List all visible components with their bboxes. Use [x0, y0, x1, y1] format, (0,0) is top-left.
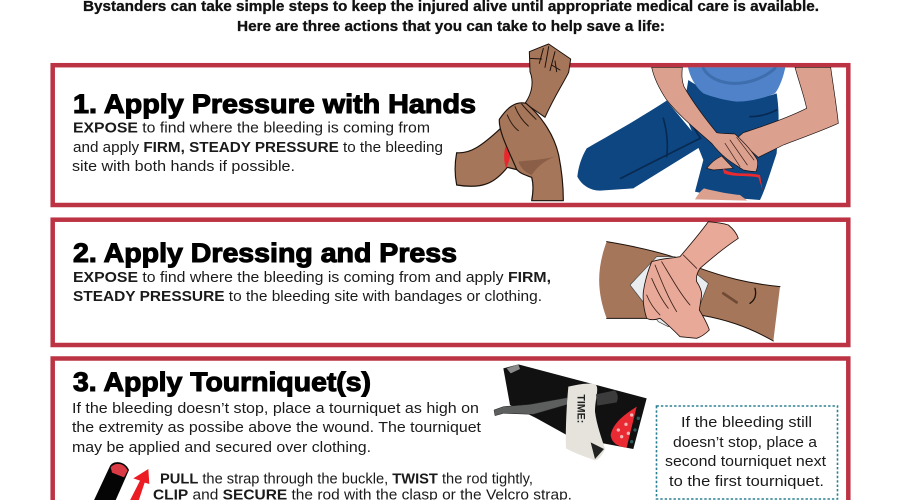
text: step 3 instructions: the extremity as possibe above the wound. The tourniquet: [72, 420, 481, 436]
text: step 1 instructions: [72, 120, 443, 175]
intro text: [83, 0, 819, 35]
panel: step 2 apply dressing and press: [53, 220, 848, 345]
text: step 1 instructions: EXPOSE to find where the bleeding is coming from: [73, 120, 430, 136]
text: pull, twist, clip and secure: PULL the strap through the buckle, TWIST the rod tightly,: [160, 472, 533, 488]
callout: second tourniquet: If the bleeding still: [681, 415, 812, 431]
callout: second tourniquet: second tourniquet next: [665, 454, 826, 470]
text: step 3 instructions: may be applied and secured over clothing.: [72, 440, 371, 456]
text: step 2 instructions: [73, 270, 551, 305]
panel: step 1 apply pressure with hands: [53, 44, 848, 205]
arrow: pull direction: [129, 469, 149, 500]
icon: tourniquet strap: [93, 462, 129, 500]
intro text: Here are three actions that you can take to help save a life:: [237, 19, 665, 35]
heading: step 2: 2. Apply Dressing and Press: [73, 238, 457, 268]
text: step 3 instructions: [72, 401, 481, 456]
heading: step 3: 3. Apply Tourniquet(s): [73, 367, 371, 397]
text: pull, twist, clip and secure: [153, 472, 572, 500]
icon: tourniquet: [494, 364, 647, 460]
icon: hands pressing a dressing on an arm: [599, 222, 780, 341]
heading: step 1: 1. Apply Pressure with Hands: [73, 89, 476, 119]
panel: step 3 apply tourniquets: [53, 358, 848, 500]
callout: second tourniquet: [656, 406, 838, 499]
text: step 1 instructions: site with both hands if possible.: [72, 159, 295, 175]
text: step 2 instructions: STEADY PRESSURE to the bleeding site with bandages or clothing.: [73, 289, 542, 305]
icon: hand gripping a bleeding arm: [455, 44, 838, 201]
text: step 1 instructions: and apply FIRM, STEADY PRESSURE to the bleeding: [73, 140, 443, 156]
callout: second tourniquet: doesn’t stop, place a: [673, 435, 818, 451]
callout: second tourniquet: to the first tourniquet.: [669, 474, 824, 490]
text: step 2 instructions: EXPOSE to find where the bleeding is coming from and apply FIRM,: [73, 270, 551, 286]
icon: tourniquet: TIME:: [575, 394, 587, 423]
text: step 3 instructions: If the bleeding doesn’t stop, place a tourniquet as high on: [72, 401, 479, 417]
